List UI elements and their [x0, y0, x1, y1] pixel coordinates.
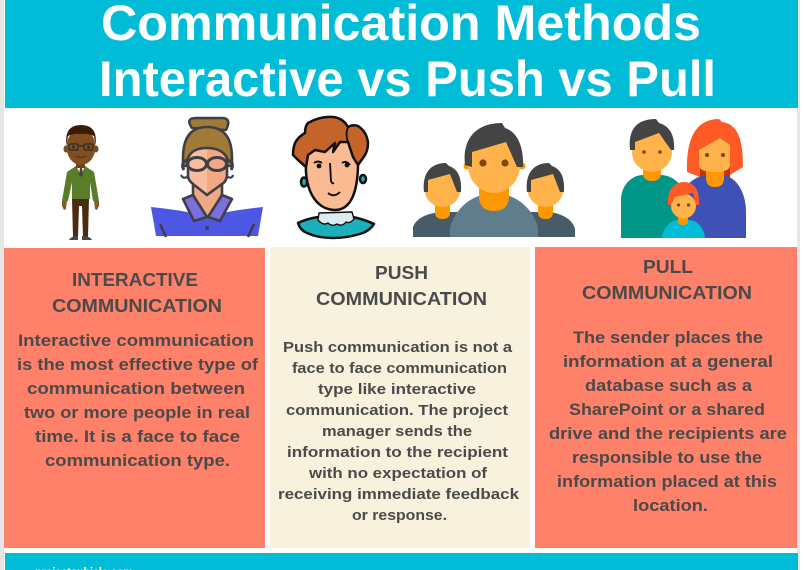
text: push description: communication. The project — [286, 402, 508, 419]
panel: pull communication — [535, 247, 797, 548]
text: push description: receiving immediate feedback — [278, 486, 520, 503]
text: interactive description: two or more people in real — [24, 404, 250, 422]
heading: push: PUSH — [375, 262, 428, 283]
text: push description — [278, 339, 520, 524]
text: pull description — [549, 329, 787, 515]
text: interactive description: time. It is a face to face — [35, 428, 240, 446]
heading: interactive: COMMUNICATION — [52, 295, 222, 316]
title banner — [5, 0, 798, 108]
icon: woman with red hair and collar — [293, 117, 374, 238]
text: pull description: information at a general — [563, 353, 773, 371]
text: push description: Push communication is not a — [283, 339, 513, 356]
heading: push: COMMUNICATION — [316, 288, 487, 309]
text: push description: type like interactive — [318, 381, 476, 398]
icon: woman with glasses and bun — [151, 118, 263, 237]
heading: interactive: INTERACTIVE — [72, 269, 198, 290]
icon: family with child — [621, 119, 746, 238]
text: push description: manager sends the — [322, 423, 472, 440]
icon: man in green sweater — [62, 125, 99, 240]
text: pull description: database such as a — [585, 377, 753, 395]
text: interactive description: Interactive communication — [18, 332, 254, 350]
text: interactive description — [17, 332, 259, 470]
text: push description: with no expectation of — [308, 465, 488, 482]
text: pull description: location. — [633, 497, 708, 515]
text: pull description: information placed at this — [557, 473, 777, 491]
text: pull description: SharePoint or a shared — [569, 401, 765, 419]
text: pull description: drive and the recipients are — [549, 425, 787, 443]
heading: pull: COMMUNICATION — [582, 282, 752, 303]
text: pull description: responsible to use the — [572, 449, 762, 467]
panel: interactive communication — [4, 248, 265, 548]
text: interactive description: is the most effective type of — [17, 356, 259, 374]
heading: interactive — [52, 269, 222, 316]
text: push description: or response. — [352, 507, 447, 524]
text: interactive description: communication between — [27, 380, 245, 398]
icon: group of three people — [413, 123, 575, 237]
text: interactive description: communication type. — [45, 452, 230, 470]
heading: push — [316, 262, 487, 309]
text: push description: face to face communication — [292, 360, 507, 377]
panel: push communication — [270, 247, 530, 548]
text: pull description: The sender places the — [573, 329, 763, 347]
footer banner — [5, 553, 798, 570]
heading: pull — [582, 256, 752, 303]
text: push description: information to the recipient — [287, 444, 508, 461]
title banner: Interactive vs Push vs Pull — [99, 51, 716, 107]
heading: pull: PULL — [643, 256, 693, 277]
